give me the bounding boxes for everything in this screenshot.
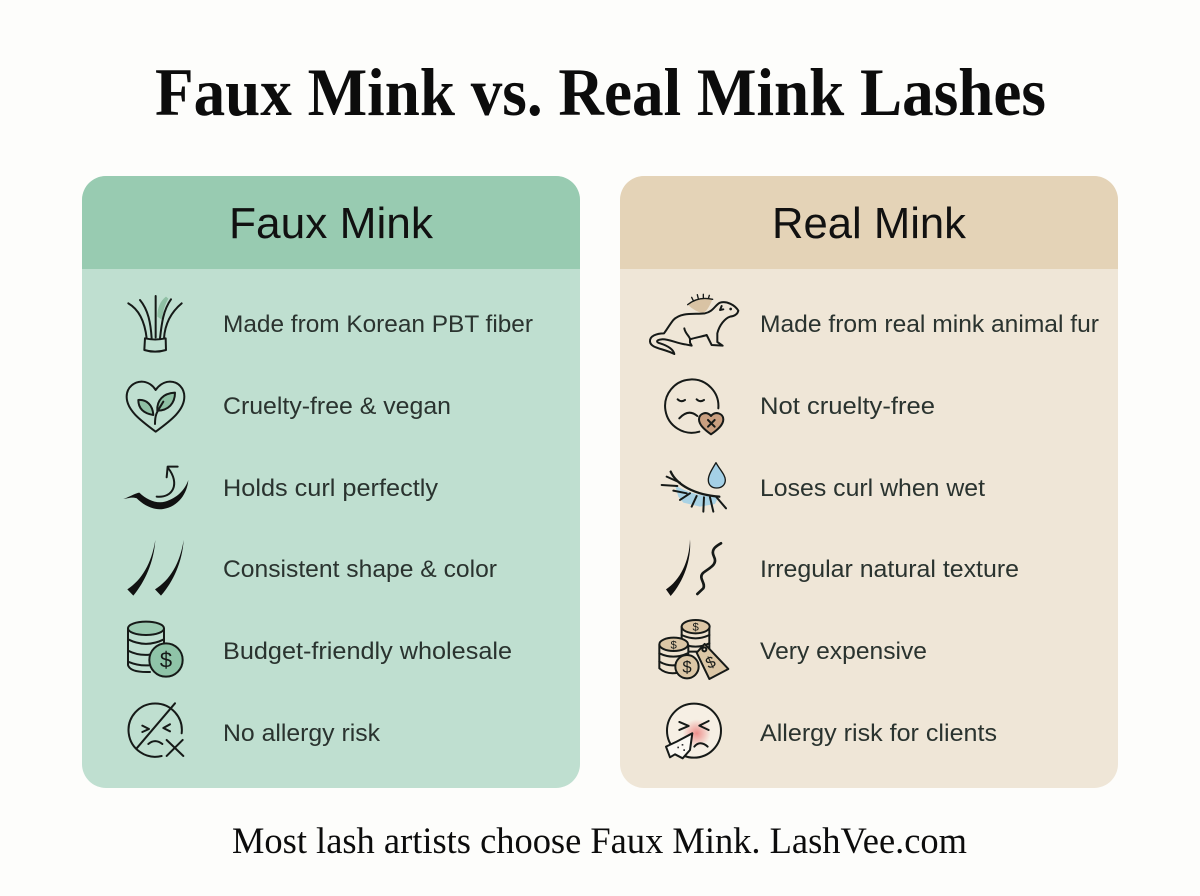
- icon: heart with leaves: [127, 382, 184, 432]
- text: allergy: Allergy risk for clients: [760, 720, 997, 747]
- icon: no allergy face: [129, 703, 183, 757]
- icon: curl with arrow: [123, 467, 188, 509]
- panel header: real mink: [620, 176, 1118, 269]
- text: budget: Budget-friendly wholesale: [223, 638, 512, 665]
- icon: wet eyelash with drop: [662, 463, 726, 512]
- icon: regular and wavy lash: [666, 539, 721, 596]
- text: curl: Holds curl perfectly: [223, 475, 438, 502]
- heading: real mink: Real Mink: [772, 199, 967, 248]
- icon: sad face with broken heart: [665, 379, 723, 434]
- text: cruelty free: Cruelty-free & vegan: [223, 393, 451, 420]
- panel: real mink: [620, 176, 1118, 788]
- text: fiber: Made from Korean PBT fiber: [223, 311, 533, 338]
- icon: coin stacks with price tag: $: [693, 622, 700, 634]
- text: not cruelty free: Not cruelty-free: [760, 393, 935, 420]
- icon: coins with dollar: [128, 622, 183, 677]
- text: irregular: Irregular natural texture: [760, 556, 1019, 583]
- icon: coins with dollar: $: [160, 648, 172, 673]
- icon: coin stacks with price tag: $: [703, 654, 719, 673]
- icon: fiber bundle: [128, 296, 182, 352]
- icon: coin stacks with price tag: [659, 620, 728, 679]
- title: Faux Mink vs. Real Mink Lashes: [155, 54, 1046, 130]
- text: expensive: Very expensive: [760, 638, 927, 665]
- text: mink fur: Made from real mink animal fur: [760, 311, 1099, 338]
- panel: faux mink: [82, 176, 580, 788]
- icon: coin stacks with price tag: $: [671, 639, 678, 651]
- heading: faux mink: Faux Mink: [229, 199, 434, 248]
- icon: mink animal: [650, 294, 738, 354]
- footer line: Most lash artists choose Faux Mink. LashVee.com: [232, 821, 967, 862]
- icon: sneezing face: [666, 704, 721, 758]
- panel header: faux mink: [82, 176, 580, 269]
- text: no allergy: No allergy risk: [223, 720, 381, 747]
- icon: two uniform lashes: [127, 540, 184, 596]
- text: loses curl: Loses curl when wet: [760, 475, 985, 502]
- icon: coin stacks with price tag: $: [682, 658, 692, 677]
- text: shape: Consistent shape & color: [223, 556, 497, 583]
